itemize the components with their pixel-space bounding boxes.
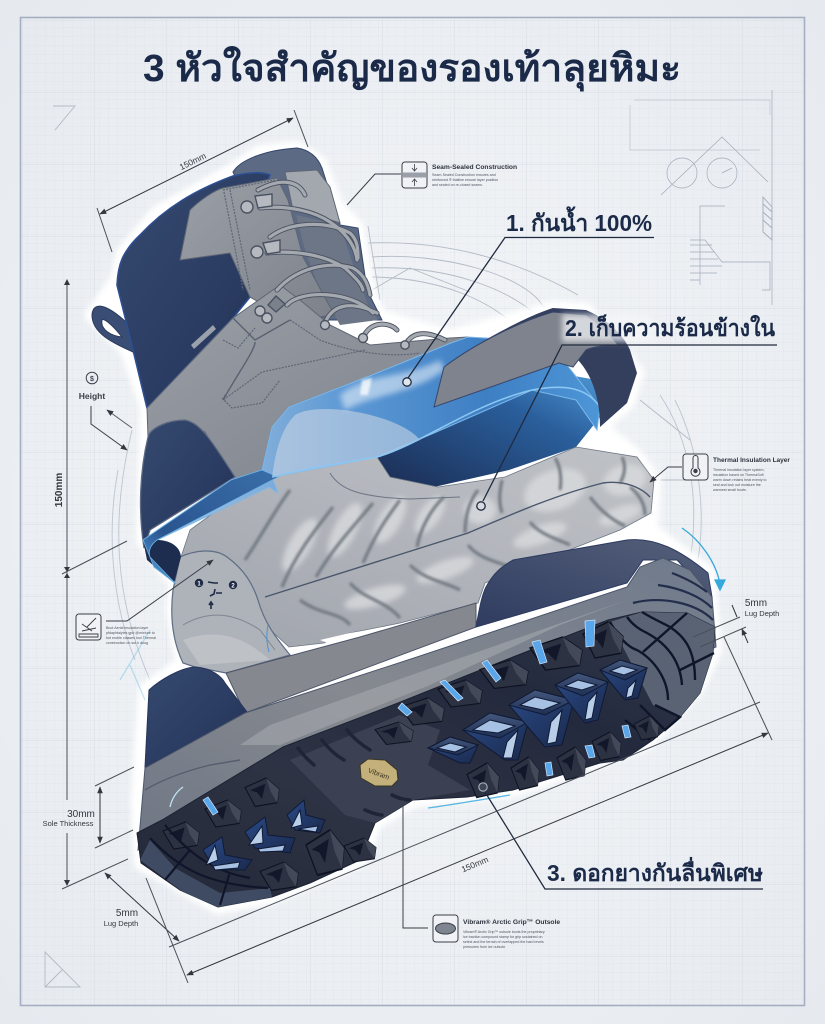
big lugs <box>203 660 647 870</box>
heel construction note: Boot Aerial insulation layer <box>106 626 149 630</box>
Vibram outsole note: pressures from ice outsole. <box>463 945 506 949</box>
toe grooves <box>610 612 714 740</box>
outsole <box>137 612 715 907</box>
thermal insulation note: Thermal Insulation Layer <box>713 457 790 464</box>
boot illustration <box>92 148 725 907</box>
heel construction note <box>76 560 213 645</box>
numbered marks on heel pad: 2 <box>231 584 235 590</box>
dimension: heel lug depth 5mm <box>104 873 179 941</box>
thermal insulation note: warm down retains heat evenly to <box>713 478 767 482</box>
thermal insulation note: seal and lock out moisture the <box>713 483 761 487</box>
thermal insulation note <box>650 454 790 492</box>
toe patch of sole <box>476 540 712 627</box>
seam-sealed note: Seam-Sealed Construction <box>432 164 517 171</box>
Vibram badge: Vibram <box>367 768 390 782</box>
inner tongue panel <box>296 215 378 325</box>
dark interior of toe <box>377 370 600 487</box>
outsole center panel <box>290 715 470 823</box>
callout 1: waterproof <box>403 206 654 386</box>
upper midsole band <box>226 603 476 713</box>
title: 3 หัวใจสำคัญของรองเท้าลุยหิมะ <box>143 46 681 92</box>
seam-sealed note: and sealed on re-closed seams. <box>432 183 483 187</box>
gray lower upper <box>147 285 468 480</box>
heel tread <box>140 825 272 907</box>
callout 2: thermal: 2. เก็บความร้อนข้างใน <box>565 313 775 341</box>
seam-sealed note <box>347 162 517 205</box>
background blueprint drawing: top right <box>630 90 772 305</box>
blue accent arcs <box>120 528 725 808</box>
stitching <box>222 180 420 408</box>
numbered marks on heel pad: 1 <box>197 582 201 588</box>
quilted thermal lining <box>181 447 654 647</box>
waterproof membrane <box>143 337 600 584</box>
boot white glow <box>92 148 715 907</box>
thermal insulation note: warmest small boots. <box>713 488 747 492</box>
heel construction note: construction on sut k doug <box>106 641 148 645</box>
dimension: shaft width 150mm: 150mm <box>178 151 208 172</box>
dimension: heel lug depth 5mm: Lug Depth <box>104 919 138 928</box>
Vibram badge <box>360 759 398 786</box>
dimension: heel lug depth 5mm: 5mm <box>116 908 138 919</box>
small tread blocks row <box>163 622 659 890</box>
callout 3: grip <box>479 783 763 889</box>
callout 3: grip: 3. ดอกยางกันลื่นพิเศษ <box>547 856 763 886</box>
callout 2: thermal <box>477 313 777 510</box>
midsole <box>138 558 716 850</box>
dimension: overall height 150mm: 150mm <box>54 473 65 507</box>
Vibram outsole note: select and the terrain of overlapped the hard levels <box>463 940 544 944</box>
quilt seams <box>245 457 645 625</box>
thermal insulation note: insulation based on ThermaSoft <box>713 473 764 477</box>
tongue back and shaft <box>233 148 382 320</box>
Vibram outsole note: Vibram® Arctic Grip™ outsole boots the proprietary <box>463 930 545 934</box>
numbered marks on heel pad <box>195 579 237 609</box>
dimension: overall height 150mm <box>54 279 128 889</box>
Vibram outsole note: Vibram® Arctic Grip™ Outsole <box>463 918 560 926</box>
arch ribs <box>298 730 410 815</box>
dimension: shaft width 150mm <box>97 110 308 252</box>
toe cap shell <box>434 308 637 427</box>
seam-sealed note: reinforced ® thailine ensure layer position <box>432 178 498 182</box>
height note: Height <box>79 391 105 401</box>
thermal insulation note: Thermal insulation layer system, <box>713 468 765 472</box>
dimension: toe lug depth 5mm: 5mm <box>745 598 767 609</box>
callout 1: waterproof: 1. กันน้ำ 100% <box>506 206 652 236</box>
dimension: sole thickness 30mm: 30mm <box>67 809 95 820</box>
dimension: toe lug depth 5mm: Lug Depth <box>745 609 779 618</box>
blue slit accents <box>203 620 631 815</box>
dimension: sole thickness 30mm: Sole Thickness <box>43 819 94 828</box>
lower sock heel pad <box>172 551 290 673</box>
dimension: sole thickness 30mm <box>43 767 134 848</box>
height note: $ <box>90 376 94 383</box>
dimension: sole length 150mm: 150mm <box>460 854 490 874</box>
heel construction note: bot eroble classes tool Thermal <box>106 636 156 640</box>
eyelets and hooks <box>241 194 409 349</box>
dimension: sole length 150mm <box>146 637 772 983</box>
laces <box>258 182 445 345</box>
seam-sealed note: Seam-Sealed Construction ensures and <box>432 173 496 177</box>
heel patch of sole <box>145 667 247 767</box>
gray quarter panel <box>180 178 335 320</box>
height note <box>79 372 132 450</box>
heel construction note: pfdaphtalytes gpd @mixture to <box>106 631 155 635</box>
dimension: toe lug depth 5mm <box>693 598 779 647</box>
pull loop <box>92 306 133 352</box>
gray collar flap <box>285 170 340 223</box>
background blueprint drawing: concentric arcs <box>45 106 701 987</box>
quilt highlights <box>275 460 650 614</box>
Vibram outsole note: ice traction compound stamp for grip sustained on <box>463 935 543 939</box>
Vibram outsole note <box>403 800 560 949</box>
heel counter <box>141 420 235 548</box>
navy rear shaft <box>117 173 270 408</box>
toe tread zone <box>610 612 715 717</box>
